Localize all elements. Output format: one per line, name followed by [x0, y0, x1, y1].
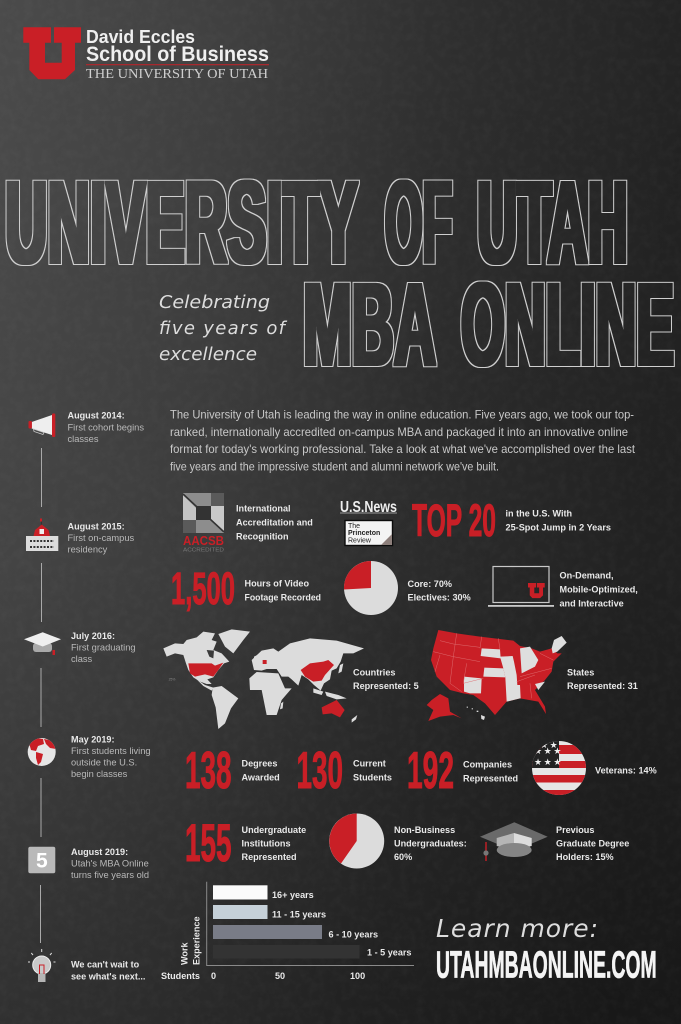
axis ticks: students: 0	[211, 971, 216, 981]
world map	[163, 629, 364, 729]
text: non-business undergraduates: Undergraduates:	[394, 838, 467, 848]
title: University of Utah: OF	[385, 157, 452, 289]
timeline: August 2015: First on-campus	[68, 533, 134, 543]
text: states represented: Represented: 31	[567, 681, 638, 691]
timeline: August 2015: August 2015:	[68, 522, 125, 532]
intro paragraph: format for today's working professional. Take a look at what we've accomplished over the last	[170, 442, 636, 456]
icon: Princeton Review logo: Review	[348, 538, 372, 544]
icon: graduate cap	[480, 822, 548, 861]
world map: 25%	[169, 678, 175, 682]
stat: current students: Students	[353, 772, 392, 782]
axis ticks: students: 100	[350, 971, 365, 981]
stat: companies represented: Companies	[463, 760, 512, 770]
icon: megaphone	[28, 414, 55, 437]
icon: AACSB accredited badge: ACCREDITED	[183, 548, 224, 554]
axis ticks: students: 50	[275, 971, 285, 981]
icon: laptop with U	[488, 566, 554, 607]
timeline: August 2019	[71, 847, 149, 880]
icon: campus building	[26, 518, 58, 551]
timeline: July 2016: July 2016:	[71, 631, 115, 641]
icon: flag circle: ★★★	[534, 757, 563, 767]
text: countries represented	[353, 668, 419, 691]
timeline: August 2014: First cohort begins	[68, 422, 144, 432]
stat: undergraduate institutions: Institutions	[242, 838, 290, 848]
icon: AACSB accredited badge	[183, 493, 224, 554]
timeline: what's next: We can't wait to	[71, 960, 140, 970]
bar: 1-5 years: 1 - 5 years	[367, 948, 412, 958]
timeline: May 2019: May 2019:	[71, 734, 114, 744]
text: international accreditation: International	[236, 504, 291, 514]
stat: companies represented: 192	[407, 742, 454, 800]
text: non-business undergraduates: 60%	[394, 852, 412, 862]
stat: degrees awarded: Degrees	[242, 758, 277, 768]
bar: 11-15 years: 11 - 15 years	[272, 910, 326, 920]
icon: flag circle: ★★★	[534, 746, 563, 756]
stat: top 20: TOP 20	[412, 495, 496, 546]
pie chart: non-business undergraduates	[329, 814, 384, 868]
timeline: August 2014: August 2014:	[68, 410, 125, 420]
timeline: May 2019: First students living	[71, 746, 151, 756]
bar: 16+ years: 16+ years	[272, 890, 314, 900]
logo wordmark: THE UNIVERSITY OF UTAH	[86, 66, 268, 81]
bar: 1-5 years	[213, 945, 412, 958]
stat: current students: Current	[353, 758, 386, 768]
bar: 16+ years	[213, 885, 314, 900]
US states map	[427, 630, 567, 721]
timeline: May 2019: begin classes	[71, 769, 128, 779]
logo wordmark: David Eccles	[86, 26, 195, 47]
intro paragraph: ranked, internationally accredited on-campus MBA and packaged it into an innovative online	[170, 425, 628, 439]
text: on-demand: On-Demand,	[560, 570, 614, 580]
stat: degrees awarded: 138	[185, 742, 232, 800]
text: non-business undergraduates: Non-Business	[394, 825, 455, 835]
title: MBA Online: MBA	[303, 259, 436, 391]
text: graduate degree holders: Graduate Degree	[556, 838, 629, 848]
intro paragraph: The University of Utah is leading the way in online education. Five years ago, we took our top-	[170, 408, 634, 422]
tagline: celebrating five years of excellence	[159, 292, 288, 365]
timeline connector lines	[40, 448, 42, 943]
bar: 6-10 years: 6 - 10 years	[328, 930, 378, 940]
icon: five badge: 5	[36, 850, 48, 872]
timeline: May 2019: outside the U.S.	[71, 758, 137, 768]
text: core and electives: Electives: 30%	[408, 592, 471, 602]
stat: 1,500 hours: 1,500	[171, 563, 235, 614]
pie chart: core vs electives	[344, 561, 398, 615]
timeline: what's next	[71, 960, 145, 982]
timeline: May 2019	[71, 734, 151, 779]
icon: flag circle	[532, 740, 586, 795]
logo wordmark: School of Business	[86, 43, 269, 66]
stat: degrees awarded: Awarded	[242, 772, 280, 782]
text: on-demand	[560, 570, 638, 608]
text: on-demand: Mobile-Optimized,	[560, 584, 638, 594]
text: countries represented: Countries	[353, 668, 395, 678]
stat: undergraduate institutions: Undergraduate	[242, 825, 306, 835]
timeline: August 2015	[68, 522, 134, 554]
icon: light bulb	[28, 949, 56, 982]
text: non-business undergraduates	[394, 825, 467, 862]
text: graduate degree holders: Previous	[556, 825, 594, 835]
text: states represented	[567, 668, 638, 691]
timeline: July 2016: class	[71, 654, 93, 664]
tagline: celebrating five years of excellence: Celebrating	[159, 292, 270, 313]
timeline: August 2015: residency	[68, 544, 108, 554]
timeline: August 2014	[68, 410, 144, 444]
icon: US News logo: U.S.News	[340, 499, 397, 516]
stat: undergraduate institutions: Represented	[242, 852, 297, 862]
call to action: learn more	[436, 914, 657, 987]
text: graduate degree holders	[556, 825, 629, 862]
icon: Princeton Review logo: Princeton	[348, 530, 380, 537]
axis label: work experience: Experience	[192, 916, 202, 965]
icon: Princeton Review logo	[345, 520, 392, 546]
call to action: learn more: Learn more:	[436, 914, 598, 943]
icon: five badge	[28, 847, 55, 873]
timeline: what's next: see what's next...	[71, 972, 145, 982]
stat: 1,500 hours: Hours of Video	[244, 578, 309, 588]
bar: 6-10 years	[213, 925, 378, 940]
text: core and electives	[408, 579, 471, 602]
bar: 11-15 years	[213, 905, 326, 920]
axis ticks: students: Students	[161, 971, 200, 981]
timeline: July 2016: First graduating	[71, 642, 136, 652]
stat: companies represented: Represented	[463, 774, 518, 784]
timeline: July 2016	[71, 631, 136, 664]
timeline: August 2019: August 2019:	[71, 847, 128, 857]
stat: top 20: in the U.S. With	[506, 508, 572, 518]
tagline: celebrating five years of excellence: five years of	[159, 318, 288, 339]
icon: AACSB accredited badge: AACSB	[183, 533, 224, 548]
stat: current students: 130	[296, 742, 343, 800]
tagline: celebrating five years of excellence: excellence	[159, 344, 257, 365]
stat: 1,500 hours: Footage Recorded	[244, 592, 321, 602]
text: graduate degree holders: Holders: 15%	[556, 852, 614, 862]
icon: globe	[28, 738, 56, 766]
timeline: August 2019: Utah's MBA Online	[71, 858, 149, 868]
bar chart: work experience	[161, 882, 414, 981]
icon: graduation cap	[24, 632, 61, 655]
icon: flag circle: ★★	[540, 740, 559, 750]
timeline: August 2019: turns five years old	[71, 870, 149, 880]
axis label: work experience: Work	[180, 941, 190, 965]
text: veterans: Veterans: 14%	[595, 766, 657, 776]
intro paragraph: five years and the impressive student and alumni network we've built.	[170, 460, 499, 474]
text: core and electives: Core: 70%	[408, 579, 452, 589]
logo wordmark	[86, 26, 269, 81]
stat: top 20: 25-Spot Jump in 2 Years	[506, 522, 611, 532]
text: states represented: States	[567, 668, 594, 678]
timeline: August 2014: classes	[68, 434, 99, 444]
text: international accreditation: Accreditation and	[236, 518, 313, 528]
intro paragraph	[170, 408, 636, 474]
text: international accreditation: Recognition	[236, 532, 289, 542]
stat: undergraduate institutions: 155	[185, 814, 232, 873]
icon: Princeton Review logo: The	[348, 523, 360, 530]
logo: David Eccles School of Business	[23, 26, 269, 81]
axis label: work experience	[180, 916, 202, 965]
icon: block U	[23, 27, 81, 79]
axis ticks: students	[161, 971, 365, 981]
text: international accreditation	[236, 504, 313, 542]
text: on-demand: and Interactive	[560, 598, 624, 608]
text: countries represented: Represented: 5	[353, 681, 419, 691]
